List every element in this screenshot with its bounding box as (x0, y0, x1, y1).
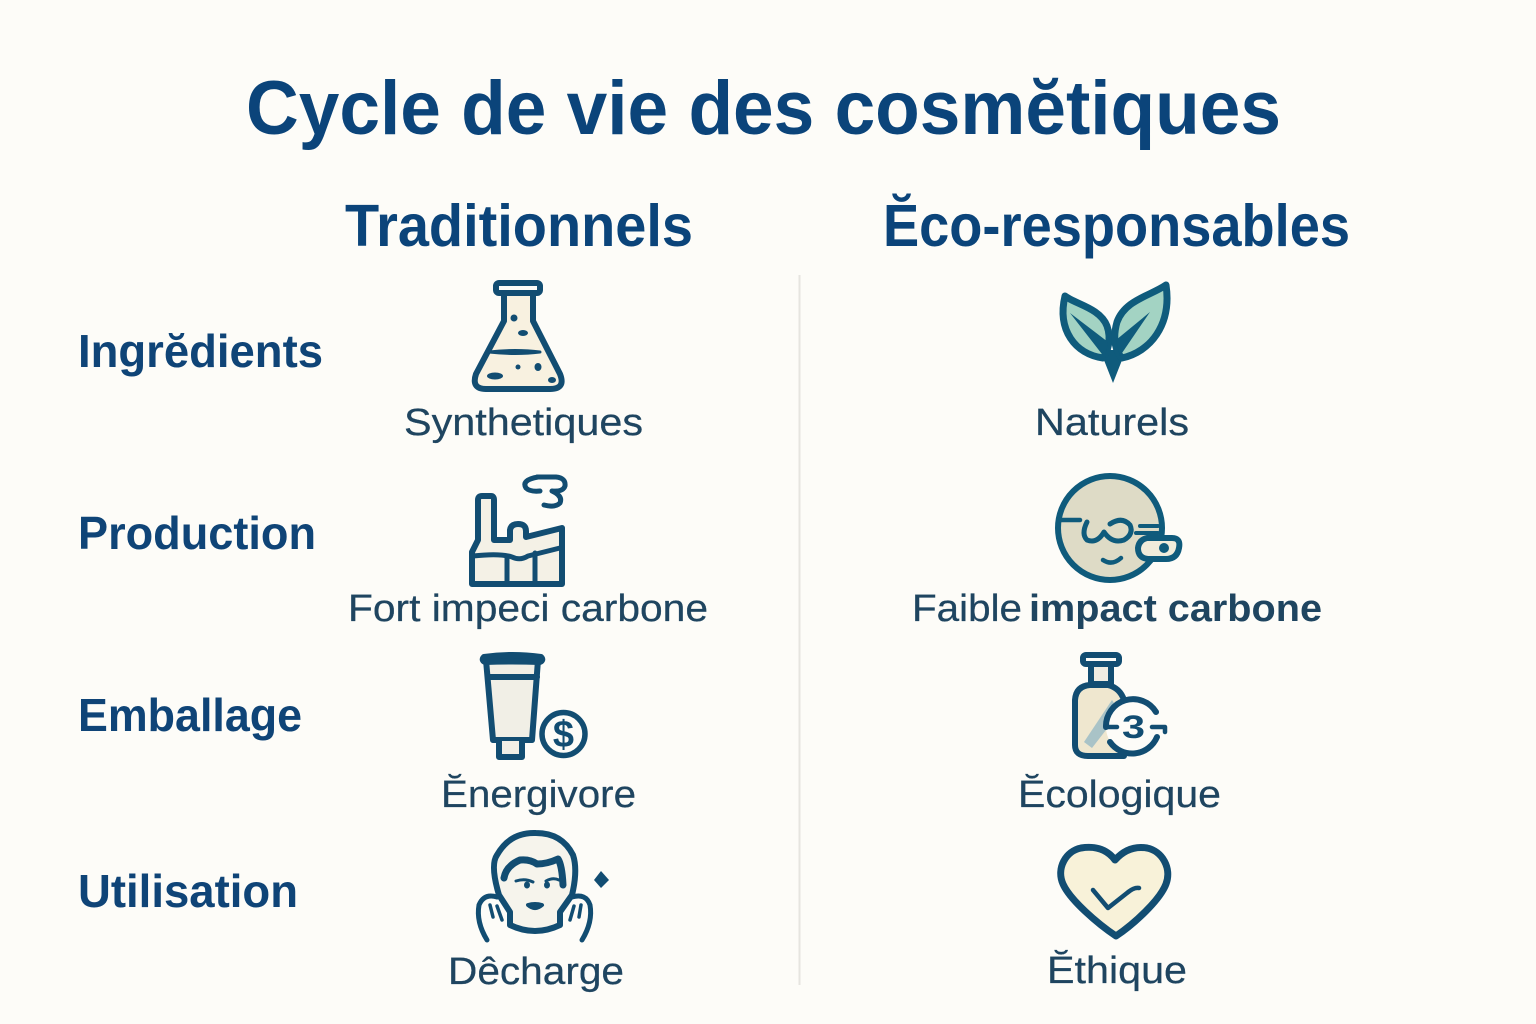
icon: two leaves (1063, 285, 1167, 383)
icon: tube with dollar coin: $ (553, 714, 574, 756)
item label: Faible impact carbone (912, 588, 1322, 630)
item label: Faible impact carbone: impact carbone (1029, 588, 1322, 630)
item label: Décharge: Dêcharge (448, 951, 624, 993)
item label: Faible impact carbone: Faible (912, 588, 1022, 630)
icon: heart with check (1061, 847, 1168, 936)
icon: factory with smoke (472, 477, 565, 584)
icon: flask (475, 283, 562, 389)
column heading: Éco-responsables: Ĕco-responsables (883, 193, 1350, 259)
icon: tube with dollar coin (483, 655, 585, 757)
item label: Synthetiques: Synthetiques (404, 402, 643, 444)
row label: Emballage: Emballage (78, 689, 302, 741)
column heading: Traditionnels: Traditionnels (345, 193, 693, 259)
icon: smiling globe with glasses (1058, 476, 1179, 580)
item label: Écologique: Ĕcologique (1018, 773, 1221, 816)
icon: person face with hands (478, 833, 609, 940)
icon: bottle with recycle 3 (1075, 655, 1165, 756)
row label: Utilisation: Utilisation (78, 865, 298, 917)
item label: Fort impeci carbone: Fort impeci carbone (348, 588, 708, 630)
item label: Naturels: Naturels (1035, 402, 1189, 444)
row label: Ingrédients: Ingrĕdients (78, 325, 323, 377)
title: Cycle de vie des cosmĕtiques (246, 66, 1281, 151)
icon: bottle with recycle 3: 3 (1122, 709, 1145, 745)
item label: Énergivore: Ĕnergivore (441, 773, 636, 816)
row label: Production: Production (78, 507, 316, 559)
item label: Éthique: Ĕthique (1047, 949, 1187, 992)
